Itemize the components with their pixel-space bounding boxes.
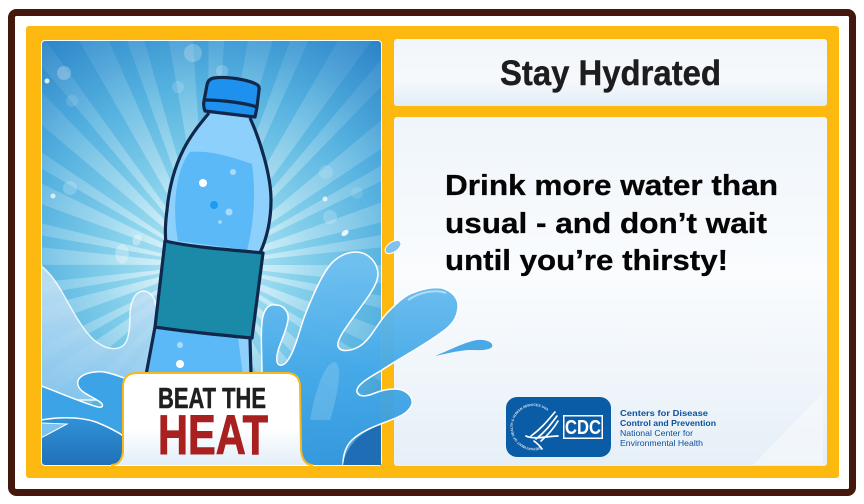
panel: title (394, 39, 827, 106)
panel: illustration (41, 40, 382, 466)
water droplet small (383, 238, 403, 256)
corner deep water (343, 425, 381, 465)
sunburst rays (42, 41, 381, 455)
floating bubbles (44, 44, 363, 263)
bubbles inside (176, 169, 236, 368)
water droplet large (435, 340, 492, 356)
logo text (620, 408, 716, 448)
logo text: Control and Prevention (620, 418, 716, 428)
bottle body (165, 113, 271, 253)
bottle outline (146, 113, 271, 375)
beat the text: BEAT THE (158, 383, 266, 415)
logo: CDC (506, 397, 611, 457)
logo text: Centers for Disease (620, 408, 708, 418)
heat text: HEAT (158, 403, 268, 466)
icon: water bottle (146, 77, 271, 375)
badge: Beat the Heat (111, 373, 313, 466)
logo text: National Center for (620, 428, 693, 438)
message text: usual - and don’t wait (445, 208, 767, 240)
corner sheen (753, 393, 823, 465)
logo text: Environmental Health (620, 438, 703, 448)
bottle label (155, 241, 263, 338)
left water splash (36, 262, 157, 470)
seal: DEPARTMENT OF HEALTH & HUMAN SERVICES USA (510, 404, 548, 450)
message text: until you’re thirsty! (445, 245, 728, 277)
message text: Drink more water than (445, 170, 778, 202)
title text: Stay Hydrated (500, 54, 721, 93)
water in bottle (175, 152, 254, 250)
splash highlight (310, 362, 339, 420)
bottle lower part (146, 327, 250, 375)
panel: message (394, 117, 827, 466)
bottle cap (204, 77, 259, 117)
CDC box: CDC (565, 417, 601, 439)
right water splash (261, 252, 458, 465)
splash top glint (408, 291, 446, 300)
